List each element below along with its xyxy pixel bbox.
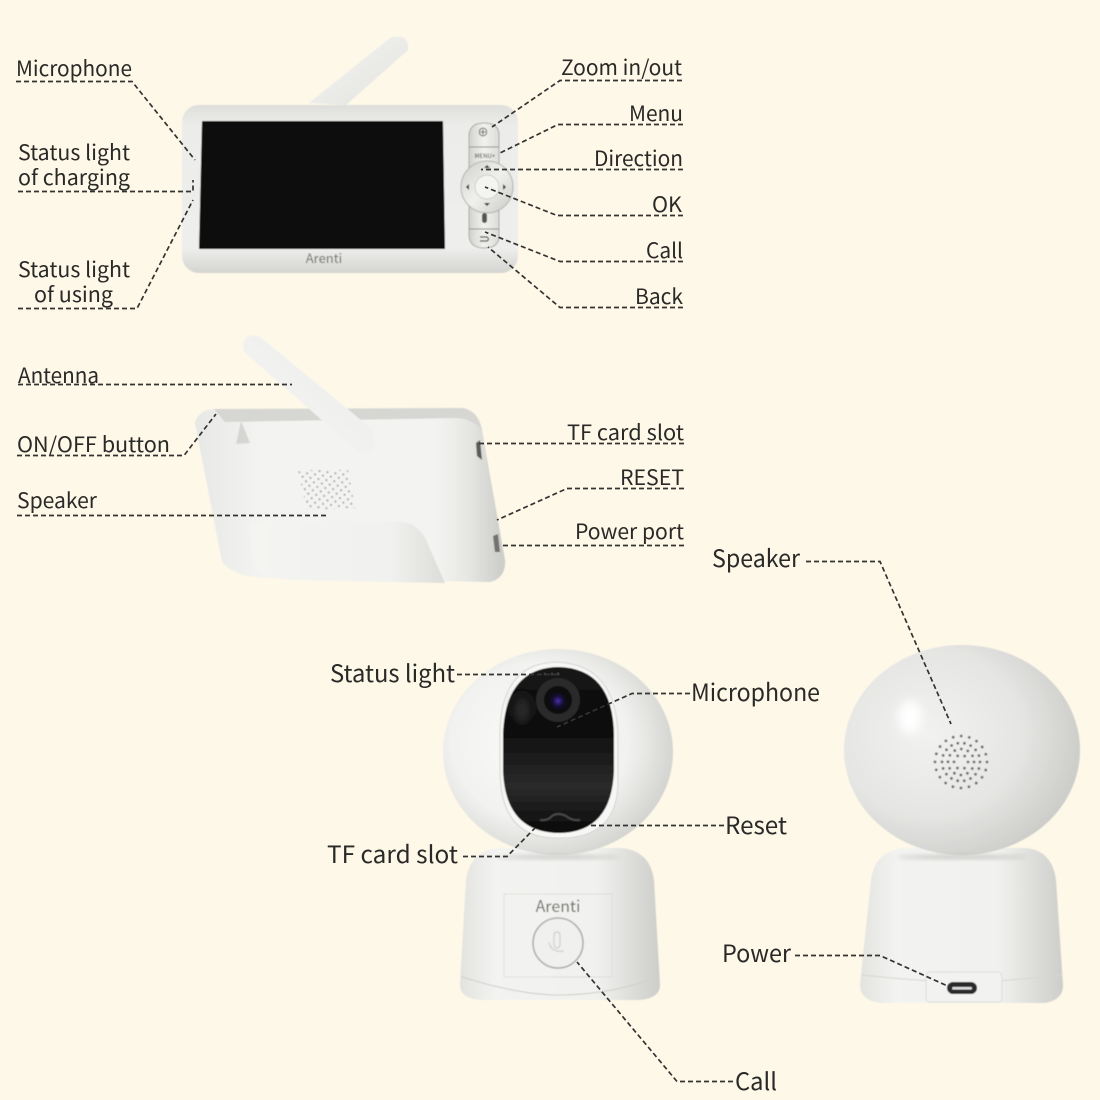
label: OK: OK: [652, 189, 682, 219]
label: Status light of charging: Status light: [18, 137, 130, 167]
leader: charging: [18, 180, 193, 192]
base seam: [862, 975, 1062, 982]
rear speaker grille: [298, 470, 355, 510]
monitor front view: [182, 36, 518, 273]
label: ON/OFF button: ON/OFF button: [17, 429, 170, 459]
leader: reset: [497, 488, 684, 520]
control buttons: [461, 123, 513, 248]
black face plate: [503, 667, 614, 833]
label: Reset: Reset: [725, 806, 787, 841]
label: Menu: Menu: [629, 98, 683, 128]
label: of using: of using: [34, 279, 113, 309]
callout: monitor back: [17, 360, 684, 546]
leader: on/off: [17, 414, 216, 456]
top ridge: [214, 408, 482, 430]
label: Direction: Direction: [594, 143, 683, 173]
base seam: [462, 977, 658, 995]
callout: monitor front left: [16, 53, 195, 309]
monitor body: [182, 105, 518, 273]
monitor screen: [199, 121, 445, 249]
face reflection: [514, 696, 530, 724]
icon: front antenna: [309, 36, 408, 105]
USB-C port: [947, 982, 977, 994]
label: Speaker: Speaker: [712, 539, 801, 574]
leader: direction: [481, 168, 683, 170]
callout: monitor front right: [481, 52, 683, 311]
leader: Microphone: [16, 82, 195, 160]
leader: TF: [478, 442, 684, 444]
leader: back: [488, 247, 683, 308]
leader: zoom: [492, 80, 682, 127]
leader: call: [485, 232, 683, 262]
label: of charging: of charging: [18, 162, 130, 192]
label: Call: Call: [646, 235, 683, 265]
label: Call: Call: [735, 1062, 777, 1097]
label: Back: Back: [635, 281, 683, 311]
control buttons: ⊕: [478, 124, 488, 140]
leader: call: [577, 962, 733, 1082]
rear stand: [250, 522, 445, 583]
label: TF card slot: TF card slot: [327, 835, 458, 870]
ball highlight: [898, 700, 922, 734]
speaker holes: [935, 736, 987, 788]
face bezel: [500, 662, 618, 838]
label: Status light of using: Status light: [18, 254, 130, 284]
back ball: [844, 645, 1080, 855]
label: Status light: Status light: [330, 654, 455, 689]
leader: antenna: [18, 384, 292, 386]
lens: [536, 678, 580, 722]
leader: power port: [500, 544, 684, 546]
camera base: [460, 848, 660, 1000]
port cover: [926, 972, 1002, 1002]
leader: microphone: [557, 694, 690, 727]
TF slot mark: [540, 814, 580, 820]
label: Microphone: Microphone: [16, 53, 132, 83]
label: Power: Power: [722, 934, 792, 969]
status light dots: [544, 673, 559, 675]
label: Antenna: Antenna: [18, 360, 99, 390]
TF card slot: [476, 440, 482, 460]
camera ball: [443, 649, 673, 855]
camera front view: [443, 649, 673, 1000]
label: Microphone: Microphone: [691, 673, 820, 708]
call button: [533, 918, 583, 968]
monitor logo: Arenti: [306, 248, 342, 267]
leader: speaker: [17, 514, 326, 516]
rear antenna: [243, 336, 374, 454]
base shadow under ball: [496, 856, 620, 858]
camera back view: [844, 645, 1080, 1003]
leader: power: [795, 956, 952, 988]
camera logo: Arenti: [536, 893, 580, 917]
back base: [860, 848, 1063, 1003]
leader: using: [18, 200, 193, 308]
power port: [493, 534, 500, 552]
monitor back view: [195, 336, 505, 583]
leader: menu: [498, 124, 683, 154]
rear body: [195, 408, 505, 582]
base shadow under ball: [897, 856, 1027, 858]
leader: status light: [457, 674, 560, 676]
label: Power port: Power port: [575, 516, 684, 546]
leader: OK: [485, 187, 683, 216]
callout: cameras: [327, 539, 952, 1097]
label: Speaker: Speaker: [17, 485, 98, 515]
stand peg: [236, 421, 250, 444]
leader: TF: [463, 828, 535, 856]
base panel: [504, 894, 612, 977]
control buttons: MENU+: [475, 151, 496, 160]
label: Zoom in/out: Zoom in/out: [561, 52, 682, 82]
label: RESET: RESET: [620, 462, 684, 492]
label: TF card slot: TF card slot: [567, 417, 684, 447]
leader: reset: [590, 824, 724, 826]
leader: speaker: [806, 562, 951, 724]
